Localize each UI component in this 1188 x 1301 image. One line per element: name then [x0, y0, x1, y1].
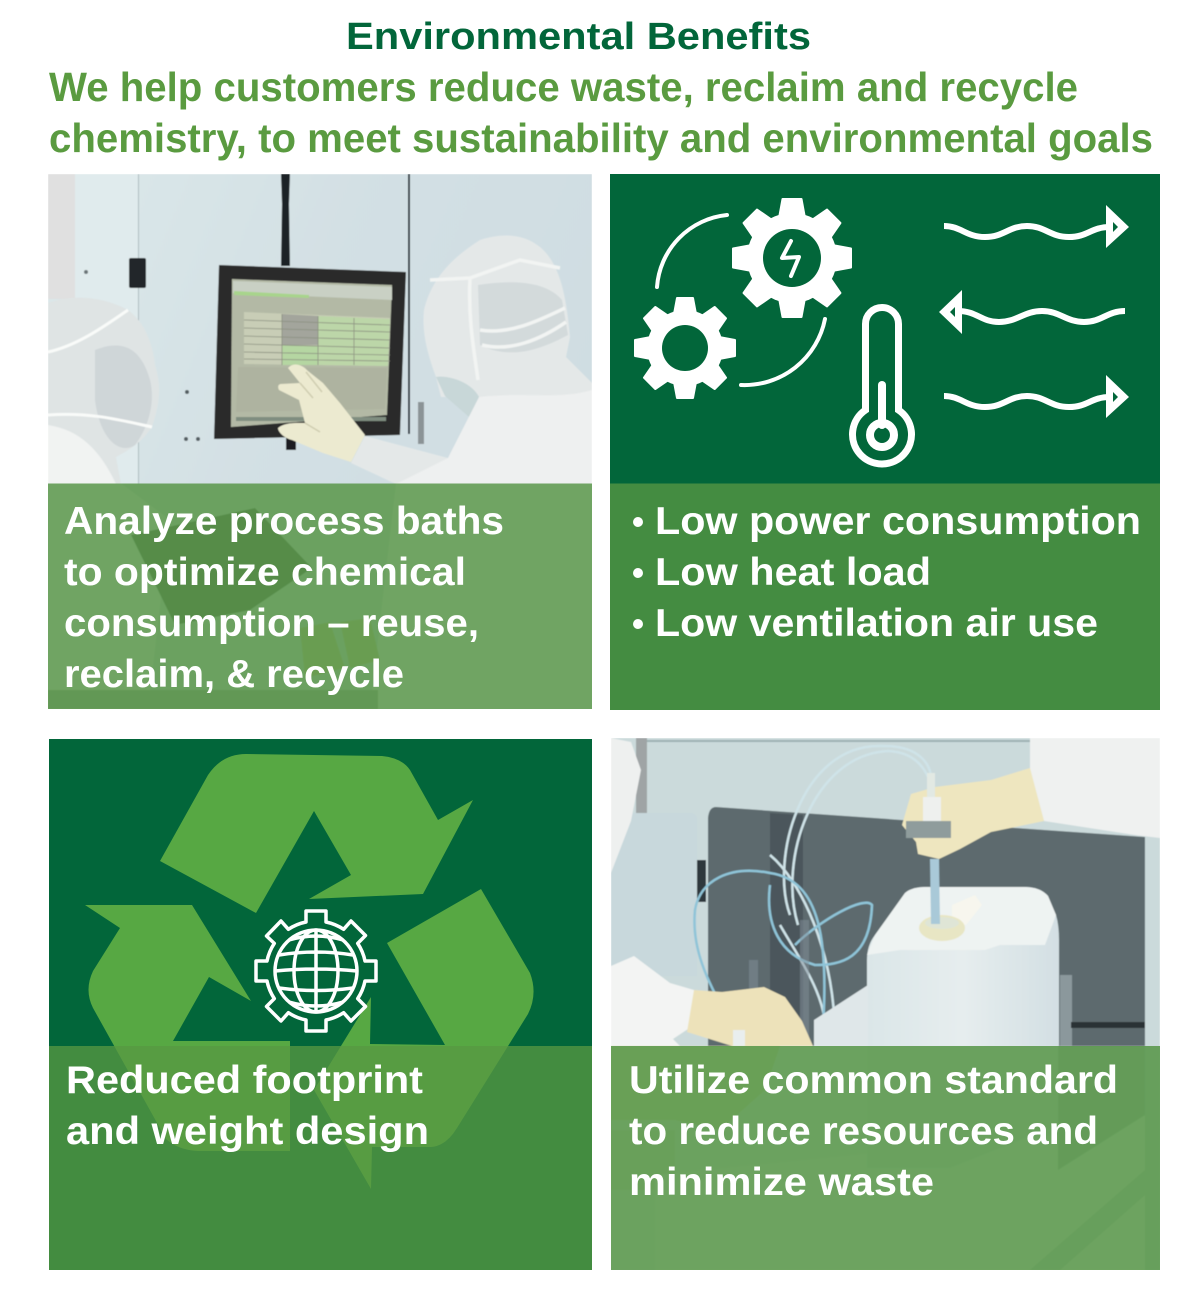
caption: Reduced footprint: [66, 1059, 423, 1102]
icon: air flow arrow right (bottom): [944, 375, 1129, 418]
left technician hood: [76, 298, 158, 483]
right technician hood and suit: [351, 236, 592, 484]
gloved hand: [278, 364, 365, 462]
lower photo content under band: [811, 1046, 866, 1047]
text band: [611, 1046, 1160, 1270]
title: Environmental Benefits: [346, 16, 811, 58]
left sleeve: [611, 956, 694, 1046]
icon: globe in gear: [256, 911, 376, 1031]
icon: gear with lightning bolt: [733, 199, 851, 317]
subtitle: We help customers reduce waste, reclaim and recycle: [49, 64, 1078, 110]
caption: and weight design: [66, 1110, 429, 1153]
bullet list: Low heat load: [655, 551, 931, 594]
icon: air flow arrow left (middle): [939, 290, 1125, 334]
caption: to reduce resources and: [629, 1110, 1098, 1153]
caption: [64, 500, 504, 696]
photo: filling chemical jug: [611, 738, 1160, 1169]
text band: [610, 484, 1160, 710]
icon: air flow arrow right (top): [944, 205, 1129, 248]
tubing: [770, 746, 931, 1040]
left glove: [687, 987, 813, 1046]
bullet list: [633, 500, 1141, 645]
right sleeve: [1030, 738, 1160, 838]
subtitle: chemistry, to meet sustainability and environmental goals: [49, 115, 1153, 161]
caption: [630, 1064, 1116, 1196]
panel: analyze process baths: [48, 174, 592, 710]
icon: thermometer: [852, 308, 911, 464]
bullet list: Low power consumption: [655, 500, 1141, 543]
photo: technicians at touch screen: [48, 174, 592, 709]
icon: small gear: [635, 298, 735, 398]
text band: [49, 1046, 592, 1270]
icon: circular motion arcs: [657, 215, 825, 385]
bullet list: Low ventilation air use: [655, 602, 1098, 645]
caption: reclaim, & recycle: [64, 653, 404, 696]
subtitle: [49, 64, 1153, 161]
caption: Analyze process baths: [64, 500, 504, 543]
caption: consumption – reuse,: [64, 602, 479, 645]
caption: [66, 1059, 429, 1153]
lower photo content under band: [48, 484, 592, 709]
caption: Utilize common standard: [629, 1059, 1118, 1102]
icon: recycling symbol: [85, 754, 534, 1189]
right glove: [902, 768, 1044, 859]
panel: low power, heat, ventilation: [610, 174, 1160, 710]
caption: to optimize chemical: [64, 551, 466, 594]
caption: minimize waste: [629, 1161, 934, 1204]
text band: [48, 484, 592, 710]
panel: common standard: [611, 738, 1160, 1270]
panel: reduced footprint: [49, 739, 592, 1270]
jug: [866, 886, 1060, 1046]
